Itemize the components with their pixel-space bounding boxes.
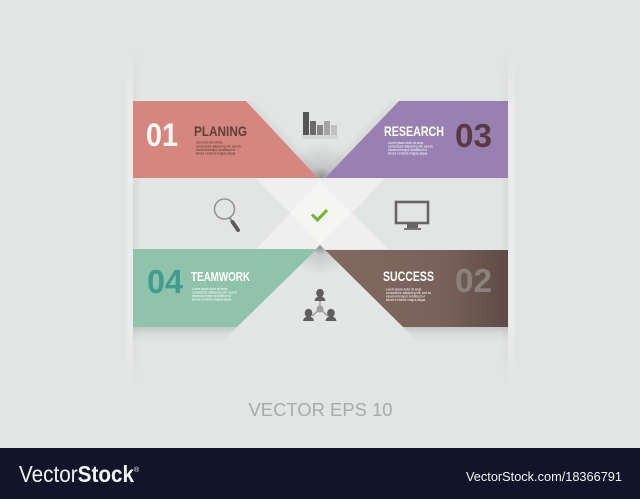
panel: 01 planing <box>133 101 318 178</box>
body text planing <box>196 140 242 156</box>
body text research: labore et dolore magna aliqua. <box>388 150 428 156</box>
body text teamwork: eiusmod tempor incididunt ut <box>192 293 232 298</box>
heading research: RESEARCH <box>384 123 444 139</box>
icon: magnifying glass <box>214 199 238 230</box>
body text success: labore et dolore magna aliqua. <box>386 297 426 302</box>
white cross: centre folds <box>255 178 388 249</box>
icon: computer monitor <box>396 202 428 230</box>
body text research: Lorem ipsum dolor sit amet, <box>388 140 424 145</box>
body text research <box>388 140 434 156</box>
number 02: 02 <box>455 262 492 299</box>
body text teamwork: consectetur adipiscing elit, sed do <box>192 290 238 294</box>
body text planing: eiusmod tempor incididunt ut <box>196 147 236 152</box>
registered mark: ® <box>134 466 140 474</box>
icon: bar chart <box>302 112 338 139</box>
panel: 04 teamwork <box>133 249 317 327</box>
body text success <box>386 286 432 302</box>
body text success: consectetur adipiscing elit, sed do <box>386 290 432 295</box>
body text planing: consectetur adipiscing elit, sed do <box>196 144 242 148</box>
fold shadows around the top centre <box>258 112 386 178</box>
number 01: 01 <box>146 117 178 153</box>
caption: VECTOR EPS 10 <box>248 400 392 420</box>
body text teamwork: labore et dolore magna aliqua. <box>192 296 232 302</box>
footer url: VectorStock.com/18366791 <box>466 469 622 484</box>
ribbon shadows <box>133 327 508 342</box>
body text teamwork: Lorem ipsum dolor sit amet, <box>192 286 228 291</box>
number 04: 04 <box>147 263 184 300</box>
heading teamwork: TEAMWORK <box>191 270 250 284</box>
icon: green check mark <box>312 210 327 220</box>
body text planing: Lorem ipsum dolor sit amet, <box>196 140 223 144</box>
body text research: eiusmod tempor incididunt ut <box>388 147 428 152</box>
panel: 02 success <box>325 250 508 327</box>
body text planing: labore et dolore magna aliqua. <box>196 150 236 156</box>
footer logo: VectorStock <box>19 461 134 487</box>
body text success: Lorem ipsum dolor sit amet, <box>386 286 422 292</box>
body text research: consectetur adipiscing elit, sed do <box>388 144 434 148</box>
panel side shadows <box>134 124 506 250</box>
heading success: SUCCESS <box>383 269 434 284</box>
body text teamwork <box>192 286 238 302</box>
heading planing: PLANING <box>194 123 247 139</box>
panel: 03 research <box>325 101 508 178</box>
footer bar <box>0 448 640 499</box>
number 03: 03 <box>455 117 492 154</box>
body text success: eiusmod tempor incididunt ut <box>386 294 426 298</box>
icon: people network <box>303 289 336 321</box>
bottom paper triangle <box>304 245 336 269</box>
